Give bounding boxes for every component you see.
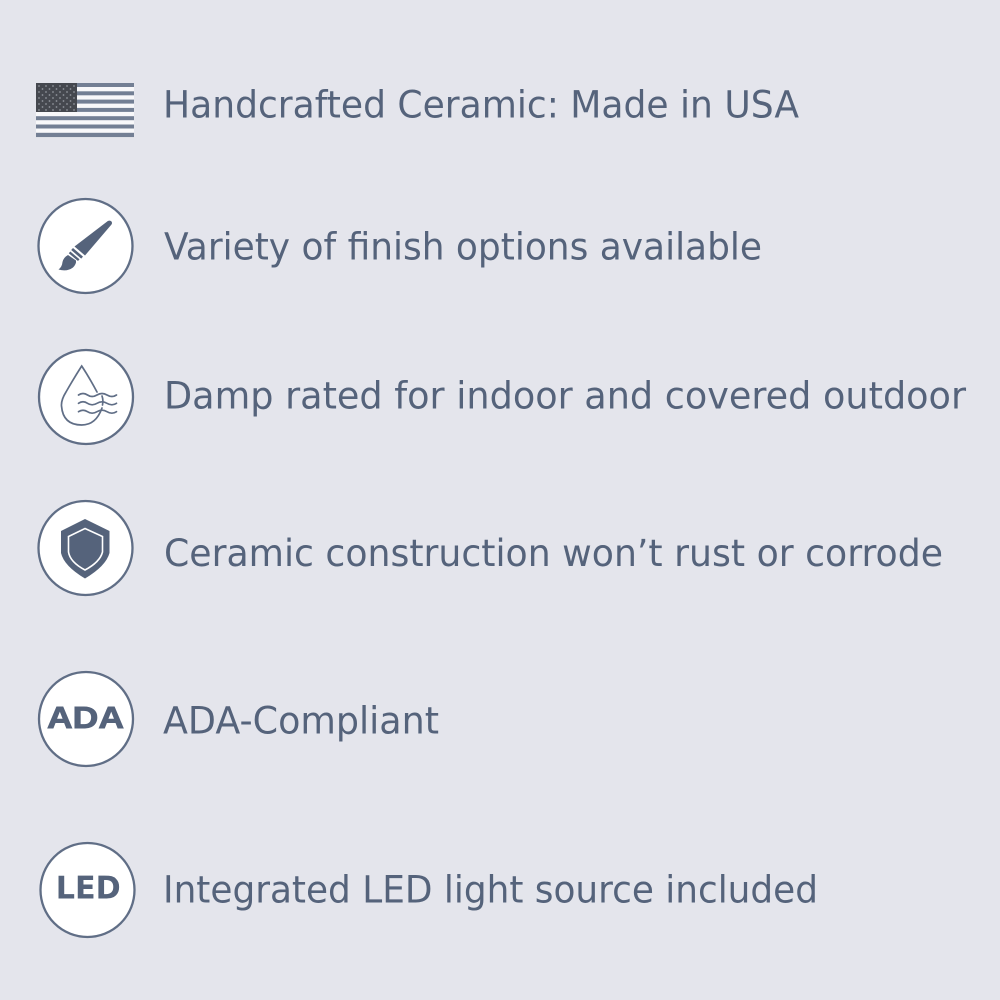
icon: ADA badge bbox=[39, 672, 133, 766]
icon: water drop with waves bbox=[39, 350, 133, 444]
icon: ADA badge: ADA bbox=[47, 700, 124, 735]
icon: LED badge: LED bbox=[56, 871, 121, 907]
icon: LED badge bbox=[40, 843, 134, 937]
text: ADA compliant: ADA-Compliant bbox=[163, 699, 439, 743]
text: damp rated: Damp rated for indoor and covered outdoor bbox=[164, 374, 967, 418]
icon: shield bbox=[38, 501, 132, 595]
text: finish options: Variety of finish options available bbox=[164, 225, 762, 269]
text: handcrafted ceramic: Handcrafted Ceramic: Made in USA bbox=[163, 83, 799, 127]
icon: paint brush bbox=[38, 199, 132, 293]
icon: american flag bbox=[36, 83, 134, 138]
text: ceramic construction: Ceramic construction won’t rust or corrode bbox=[164, 531, 943, 575]
text: integrated LED: Integrated LED light source included bbox=[163, 868, 818, 912]
